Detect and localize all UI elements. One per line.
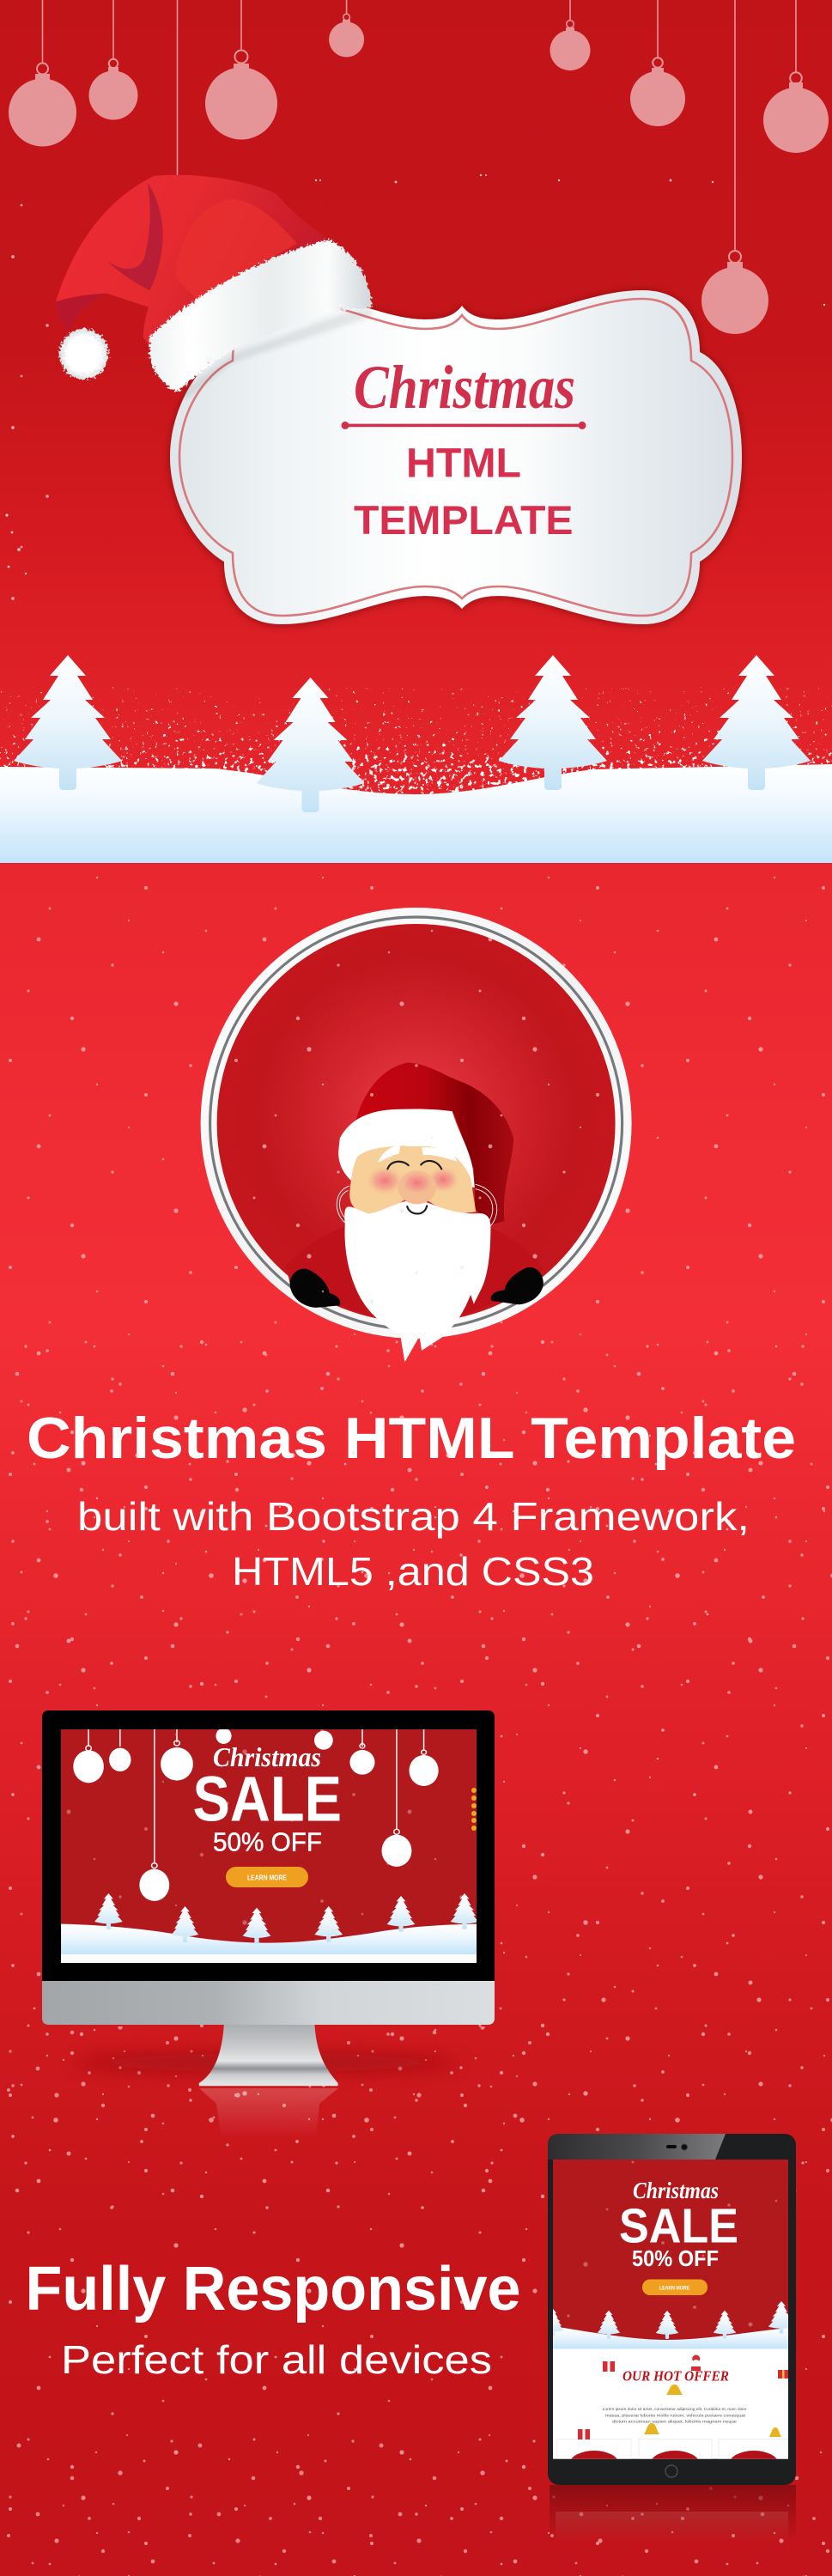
label plaque bbox=[170, 290, 742, 624]
monitor stand bbox=[199, 2024, 338, 2086]
santa hat bbox=[56, 175, 373, 399]
icon: ornament 2 bbox=[89, 0, 137, 120]
santa left glove bbox=[289, 1268, 340, 1308]
tablet camera bbox=[666, 2144, 687, 2150]
subheading line 1: built with Bootstrap 4 Framework, bbox=[77, 1494, 750, 1539]
icon: mini santa bbox=[691, 2354, 701, 2371]
hanging ornaments bbox=[9, 0, 829, 334]
main heading: Christmas HTML Template bbox=[27, 1406, 796, 1471]
santa right glove bbox=[491, 1267, 544, 1304]
icon: ornament 3 bbox=[205, 0, 277, 139]
tablet body copy: Lorem ipsum dolor sit amet, consectetur adipiscing elit. Curabitur et, nunc dolor bbox=[603, 2407, 747, 2411]
responsive subheading: Perfect for all devices bbox=[61, 2337, 492, 2382]
tablet mockup bbox=[542, 2134, 796, 2541]
tablet offer heading: OUR HOT OFFER bbox=[622, 2368, 729, 2385]
tablet reflection bbox=[550, 2485, 796, 2541]
icon: ornament 1 bbox=[9, 0, 76, 146]
santa smile bbox=[407, 1206, 427, 1213]
screen ground strip bbox=[61, 1954, 477, 1963]
desktop monitor mockup bbox=[42, 1710, 495, 2138]
hat body bbox=[56, 175, 331, 346]
monitor black bezel bbox=[42, 1710, 495, 1981]
icon: gift 2 bbox=[778, 2370, 788, 2379]
screen discount text: 50% OFF bbox=[213, 1827, 322, 1857]
tablet home button bbox=[665, 2465, 677, 2477]
tablet discount text: 50% OFF bbox=[632, 2245, 719, 2271]
snowy ground bbox=[0, 764, 832, 863]
tablet button: LEARN MORE bbox=[659, 2286, 690, 2291]
tablet screen background bbox=[553, 2160, 788, 2459]
screen SALE heading: SALE bbox=[192, 1764, 342, 1835]
tablet screen trees bbox=[542, 2301, 794, 2339]
icon: gift 3 bbox=[578, 2429, 590, 2439]
panel: product section background bbox=[0, 864, 832, 2576]
hat fur band bbox=[149, 240, 373, 392]
hat tip shadow bbox=[56, 294, 106, 332]
hat hanging string bbox=[177, 0, 178, 177]
plaque inner outline bbox=[179, 299, 732, 616]
icon: ornament 5 bbox=[550, 0, 591, 70]
icon: bell 2 bbox=[644, 2423, 659, 2434]
santa figure bbox=[286, 1062, 544, 1362]
screen ground bbox=[61, 1924, 477, 1955]
snow trees bbox=[14, 655, 811, 812]
icon: bell 3 bbox=[769, 2427, 781, 2437]
tablet SALE heading: SALE bbox=[619, 2198, 738, 2253]
medallion red disc bbox=[217, 924, 616, 1322]
santa eyebrows bbox=[378, 1144, 457, 1163]
icon: gift 1 bbox=[603, 2361, 615, 2372]
monitor floor shadow bbox=[73, 2053, 459, 2072]
santa body bbox=[286, 1225, 544, 1315]
snow splatter above ground bbox=[0, 687, 832, 799]
plaque script heading: Christmas bbox=[354, 353, 575, 422]
tablet body copy: dictum accumsan sapien aliquet, lobortis magnam neque bbox=[612, 2420, 738, 2423]
tablet screen bbox=[553, 2160, 788, 2459]
screen script heading: Christmas bbox=[213, 1741, 321, 1772]
plaque divider bbox=[342, 422, 586, 429]
santa hat bbox=[355, 1062, 513, 1224]
screen button bbox=[226, 1867, 308, 1887]
tablet body copy bbox=[603, 2407, 747, 2423]
panel: hero banner bbox=[0, 0, 832, 864]
screen ornaments bbox=[73, 1728, 439, 1901]
monitor screen bbox=[61, 1728, 478, 1963]
icon: ornament 4 bbox=[329, 0, 364, 57]
responsive heading: Fully Responsive bbox=[26, 2255, 520, 2324]
screen button: LEARN MORE bbox=[247, 1874, 287, 1882]
hat fur shadow on plaque bbox=[178, 307, 372, 399]
plaque heading HTML: HTML bbox=[406, 440, 521, 486]
icon: bell 1 bbox=[666, 2385, 683, 2395]
tablet body bbox=[548, 2134, 796, 2485]
tablet body copy: massa, placerat lobortis mollis rutrum, vehicula posuere consequat bbox=[605, 2413, 746, 2418]
monitor stand reflection bbox=[199, 2088, 338, 2138]
santa side hair bbox=[337, 1184, 497, 1225]
screen trees bbox=[94, 1893, 478, 1944]
medallion grey ring bbox=[210, 917, 622, 1329]
hat pompom bbox=[59, 329, 108, 380]
tablet white section bbox=[553, 2349, 788, 2459]
santa beard bbox=[344, 1200, 490, 1362]
santa face bbox=[349, 1145, 476, 1213]
plaque heading TEMPLATE: TEMPLATE bbox=[354, 498, 574, 544]
medallion white ring bbox=[201, 908, 632, 1339]
hero red background bbox=[0, 0, 832, 864]
monitor silver chin bbox=[42, 1981, 495, 2025]
tablet script heading: Christmas bbox=[633, 2178, 719, 2203]
santa eyes bbox=[387, 1161, 441, 1169]
screen slider dots bbox=[471, 1788, 477, 1831]
icon: ornament 7 bbox=[763, 0, 829, 153]
scattered snow on hero bbox=[0, 172, 825, 618]
hat highlight bbox=[175, 199, 297, 299]
subheading line 2: HTML5 ,and CSS3 bbox=[232, 1549, 594, 1594]
tablet gloss bbox=[548, 2134, 726, 2160]
santa blush and nose bbox=[366, 1166, 460, 1204]
icon: ornament 8 bbox=[701, 0, 768, 334]
screen background bbox=[61, 1729, 477, 1963]
falling snow bbox=[0, 864, 832, 2576]
santa fur trim bbox=[338, 1109, 475, 1188]
hat fold bbox=[104, 183, 163, 290]
tablet button bbox=[642, 2279, 708, 2295]
tablet card badges bbox=[571, 2451, 777, 2459]
plaque shape bbox=[170, 290, 742, 624]
santa medallion bbox=[201, 908, 632, 1362]
tablet screen ground bbox=[553, 2326, 788, 2349]
tablet product cards bbox=[556, 2439, 788, 2459]
icon: ornament 6 bbox=[630, 0, 685, 126]
